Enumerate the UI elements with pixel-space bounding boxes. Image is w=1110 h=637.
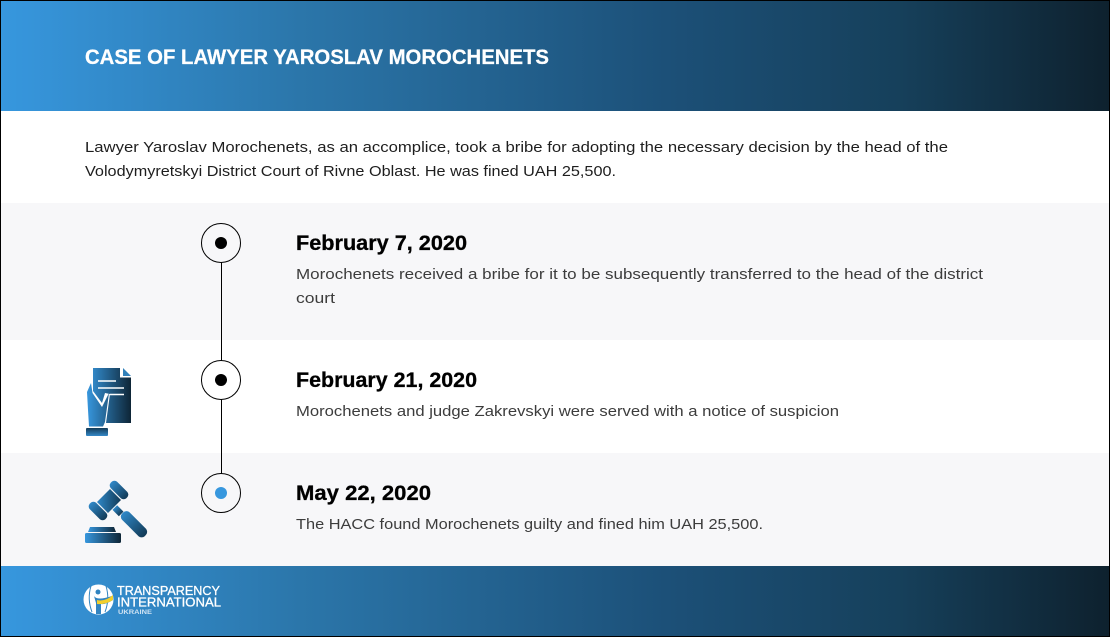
event: February 21, 2020	[296, 369, 839, 420]
timeline connector	[220, 262, 222, 474]
event: February 21, 2020: Morochenets and judge Zakrevskyi were served with a notice of suspicion	[296, 403, 839, 420]
event: February 21, 2020: February 21, 2020	[296, 369, 477, 392]
event: February 7, 2020: February 7, 2020	[296, 232, 467, 255]
panel: footer band	[1, 566, 1109, 636]
intro text: Lawyer Yaroslav Morochenets, as an accomplice, took a bribe for adopting the necessary decision by the head of the	[85, 139, 948, 156]
event: February 7, 2020: court	[296, 290, 336, 307]
timeline marker 2	[202, 360, 240, 400]
logo: Transparency International Ukraine: TRANSPARENCY	[117, 583, 220, 598]
event: May 22, 2020: May 22, 2020	[296, 482, 431, 505]
panel: row background May 22	[1, 453, 1109, 566]
timeline marker 3	[202, 474, 240, 512]
timeline marker 1	[202, 224, 240, 262]
panel: row background February 7	[1, 203, 1109, 340]
logo: Transparency International Ukraine: UKRAINE	[118, 609, 153, 616]
event: May 22, 2020	[296, 482, 763, 533]
event: May 22, 2020: The HACC found Morochenets guilty and fined him UAH 25,500.	[296, 516, 763, 533]
event: February 7, 2020	[296, 232, 984, 307]
logo globe	[84, 584, 114, 614]
intro text	[85, 139, 948, 180]
intro text: Volodymyretskyi District Court of Rivne Oblast. He was fined UAH 25,500.	[85, 163, 616, 180]
title: CASE OF LAWYER YAROSLAV MOROCHENETS	[85, 46, 549, 69]
panel: header band	[1, 1, 1109, 111]
icon: hand holding document	[86, 368, 131, 436]
logo: Transparency International Ukraine	[84, 583, 221, 616]
event: February 7, 2020: Morochenets received a bribe for it to be subsequently transferred to the head of the district	[296, 266, 984, 283]
logo: Transparency International Ukraine: INTERNATIONAL	[117, 594, 221, 610]
icon: judge gavel	[85, 479, 149, 543]
